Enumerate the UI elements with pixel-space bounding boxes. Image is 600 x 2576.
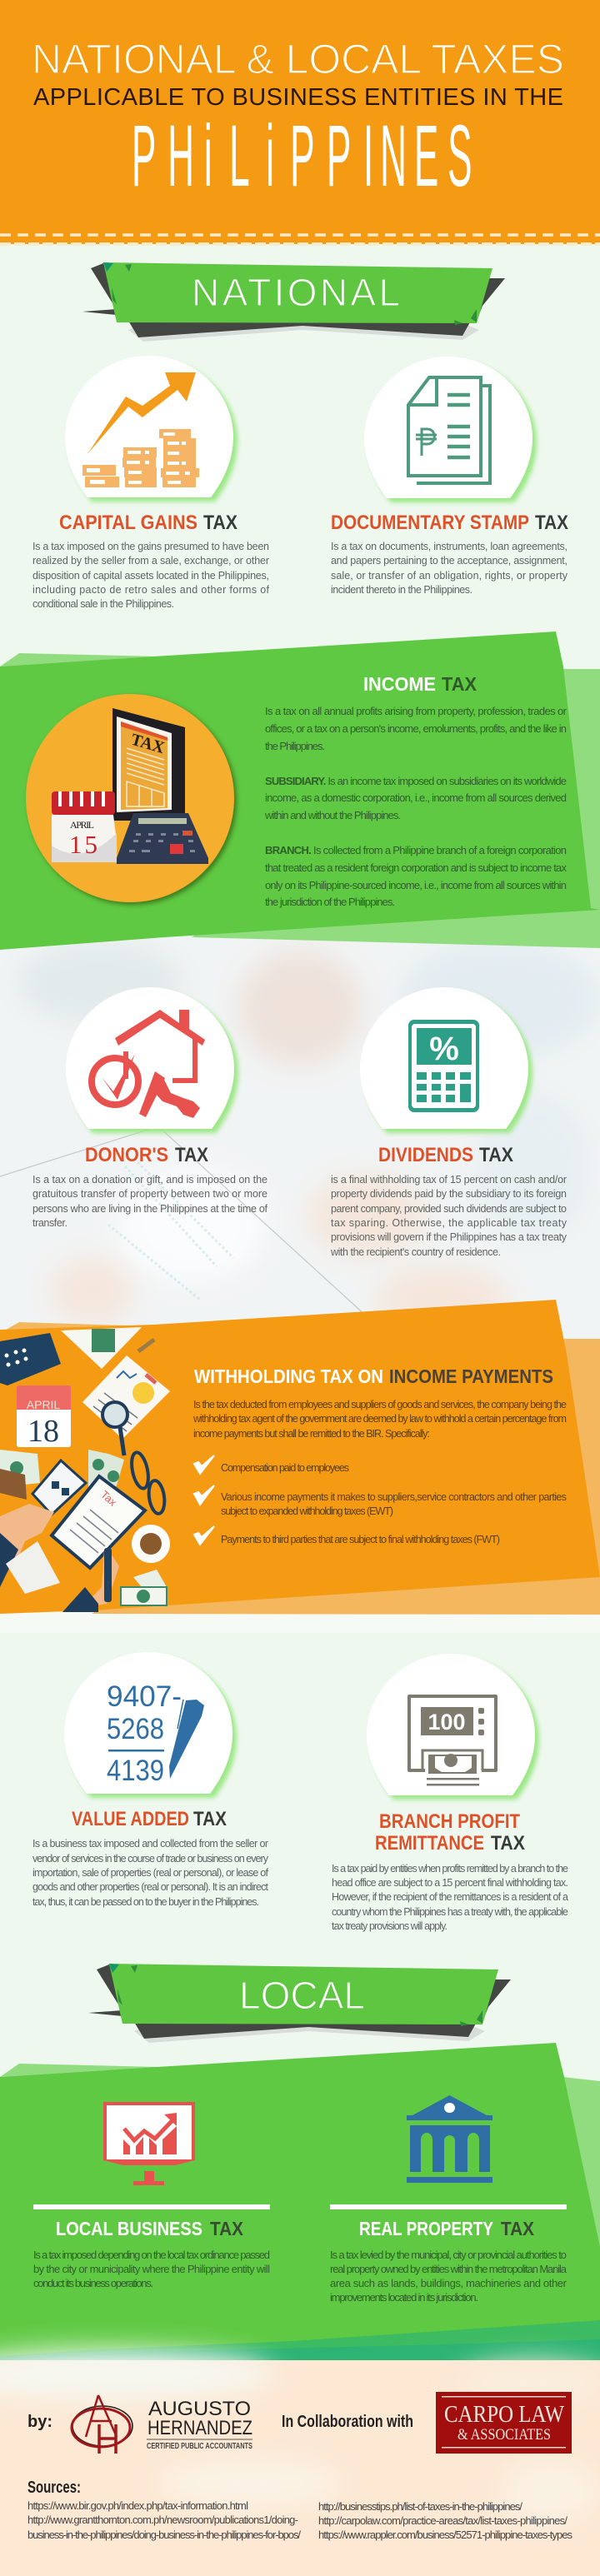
body text bbox=[32, 541, 270, 610]
logo: Augusto Hernandez: HERNANDEZ bbox=[148, 2417, 252, 2439]
body text: local business tax: conduct its business operations. bbox=[33, 2277, 153, 2289]
body text: importation, sale of properties (real or personal), or lease of bbox=[32, 1867, 269, 1879]
logo: Augusto Hernandez: AUGUSTO bbox=[148, 2398, 251, 2420]
heading: BRANCH PROFIT bbox=[379, 1810, 520, 1833]
body text: vendor of services in the course of trade or business on every bbox=[32, 1853, 269, 1865]
heading bbox=[375, 1810, 525, 1855]
body text: BRANCH. Is collected from a Philippine branch of a foreign corporation bbox=[265, 844, 567, 856]
checklist: subject to expanded withholding taxes (EWT) bbox=[221, 1505, 393, 1517]
sources list: left bbox=[28, 2499, 301, 2541]
icon: document with peso sign bbox=[408, 377, 490, 483]
heading: CAPITAL GAINS bbox=[59, 512, 198, 534]
body text: real property tax: real property owned by entities within the metropolitan Manila bbox=[330, 2263, 568, 2275]
panel: capital gains tax bbox=[32, 356, 270, 610]
panel: value added tax bbox=[32, 1652, 269, 1908]
checklist: Compensation paid to employees bbox=[221, 1462, 349, 1474]
body text: the jurisdiction of the Philippines. bbox=[265, 896, 395, 908]
illustration: desk with tax documents bbox=[0, 1327, 170, 1612]
body text: real property tax bbox=[330, 2249, 568, 2304]
heading bbox=[194, 1365, 553, 1387]
body text bbox=[32, 1838, 269, 1908]
sources heading: Sources: bbox=[28, 2479, 81, 2497]
heading: DIVIDENDS bbox=[378, 1144, 473, 1166]
body text: property dividends paid by the subsidiary to its foreign bbox=[331, 1188, 567, 1200]
body text: withholding tax agent of the government are deemed by law to withhold a certain percentage from bbox=[192, 1413, 567, 1425]
icon: monitor with rising chart bbox=[103, 2102, 195, 2185]
panel: photo background bbox=[0, 916, 600, 1350]
panel: footer bbox=[0, 2349, 600, 2576]
icon: tax tablet, calendar and calculator: APRIL bbox=[70, 819, 94, 831]
heading bbox=[363, 673, 478, 695]
header banner bbox=[0, 0, 600, 244]
heading: TAX bbox=[175, 1144, 208, 1166]
panel: dividends tax bbox=[330, 987, 568, 1258]
body text: provisions will govern if the Philippines has a tax treaty bbox=[331, 1231, 568, 1243]
icon: cash machine: 100 bbox=[428, 1710, 466, 1735]
body text: that treated as a resident foreign corporation and is subject to income tax bbox=[265, 861, 567, 874]
body text: Is the tax deducted from employees and suppliers of goods and services, the company being the bbox=[193, 1399, 567, 1410]
icon: cash machine bbox=[409, 1696, 496, 1786]
body text: goods and other properties (real or personal). It is an indirect bbox=[32, 1881, 269, 1893]
icon: government building bbox=[407, 2095, 492, 2183]
sources list: left: https://www.bir.gov.ph/index.php/tax-information.html bbox=[28, 2499, 248, 2512]
body text: local business tax: Is a tax imposed depending on the local tax ordinance passed bbox=[33, 2249, 270, 2261]
body text bbox=[192, 1399, 567, 1440]
heading: INCOME PAYMENTS bbox=[389, 1365, 553, 1387]
panel: withholding tax band bbox=[0, 1300, 600, 1633]
body text: parent company, provided such dividends are subject to bbox=[331, 1203, 567, 1215]
credit: by: by: bbox=[28, 2413, 52, 2431]
body text: Is a tax imposed on the gains presumed to have been bbox=[32, 541, 269, 552]
panel: income tax band bbox=[0, 632, 600, 950]
ribbon: local: LOCAL bbox=[239, 1974, 365, 2017]
icon: tax tablet, calendar and calculator: TAX bbox=[129, 731, 167, 757]
heading: local business tax: LOCAL BUSINESS bbox=[56, 2218, 202, 2239]
body text: head office are subject to a 15 percent final withholding tax. bbox=[332, 1877, 568, 1889]
heading: TAX bbox=[491, 1832, 525, 1855]
sources list: right: http://carpolaw.com/practice-areas/tax/list-taxes-philippines/ bbox=[318, 2514, 568, 2527]
heading: WITHHOLDING TAX ON bbox=[194, 1365, 383, 1387]
body text: country whom the Philippines has a treaty with, the applicable bbox=[332, 1906, 568, 1918]
body text: tax treaty provisions will apply. bbox=[332, 1920, 448, 1932]
heading: VALUE ADDED bbox=[72, 1808, 189, 1830]
body text: tax, thus, it can be passed on to the buyer in the Philippines. bbox=[32, 1896, 259, 1908]
body text: SUBSIDIARY. Is an income tax imposed on subsidiaries on its worldwide bbox=[265, 775, 567, 787]
body text: offices, or a tax on a person's income, emoluments, profits, and the like in bbox=[265, 722, 567, 735]
body text: disposition of capital assets located in the Philippines, bbox=[32, 570, 269, 582]
heading: INCOME bbox=[363, 673, 436, 695]
heading: TAX bbox=[193, 1808, 227, 1830]
body text: gratuitous transfer of property between two or more bbox=[32, 1188, 268, 1200]
sources list: left: business-in-the-philippines/doing-business-in-the-philippines-for-bpos/ bbox=[28, 2529, 301, 2541]
body text: conditional sale in the Philippines. bbox=[32, 598, 174, 610]
icon: tax tablet, calendar and calculator: 15 bbox=[69, 830, 98, 859]
icon: handwritten sum and pen bbox=[107, 1680, 204, 1787]
heading: real property tax: TAX bbox=[501, 2218, 535, 2239]
title line 3: PHiLiPPINES bbox=[132, 107, 472, 205]
body text: within and without the Philippines. bbox=[264, 809, 401, 821]
logo: Carpo Law and Associates: CARPO LAW bbox=[444, 2401, 565, 2428]
heading: DONOR'S bbox=[85, 1144, 168, 1166]
body text: income payments but shall be remitted to the BIR. Specifically: bbox=[193, 1428, 430, 1440]
icon: handwritten sum and pen: 5268 bbox=[107, 1713, 164, 1745]
title line 2: APPLICABLE TO BUSINESS ENTITIES IN THE bbox=[33, 84, 563, 111]
ribbon: national: NATIONAL bbox=[192, 271, 400, 314]
body text: with the recipient's country of residence. bbox=[330, 1246, 501, 1258]
body text: and papers pertaining to the acceptance, assignment, bbox=[331, 555, 568, 567]
heading: TAX bbox=[479, 1144, 513, 1166]
heading: REMITTANCE bbox=[375, 1832, 484, 1855]
panel: donor's tax bbox=[32, 987, 268, 1229]
heading: TAX bbox=[442, 673, 478, 695]
sources list: left: http://www.grantthornton.com.ph/newsroom/publications1/doing- bbox=[28, 2514, 298, 2526]
body text: is a final withholding tax of 15 percent on cash and/or bbox=[331, 1174, 567, 1186]
heading: TAX bbox=[535, 512, 568, 534]
icon: percent calculator bbox=[408, 1020, 479, 1112]
body text bbox=[330, 1174, 568, 1258]
body text: Is a tax on a donation or gift, and is imposed on the bbox=[32, 1174, 268, 1186]
illustration: desk with tax documents: 18 bbox=[28, 1414, 59, 1449]
ribbon: local bbox=[88, 1964, 511, 2043]
checklist: Various income payments it makes to suppliers,service contractors and other parties bbox=[221, 1491, 567, 1503]
logo: Augusto Hernandez bbox=[72, 2395, 252, 2454]
body text: real property tax: Is a tax levied by the municipal, city or provincial authorities to bbox=[330, 2249, 567, 2261]
icon: handwritten sum and pen: 4139 bbox=[107, 1755, 164, 1787]
body text: Is a tax on documents, instruments, loan agreements, bbox=[331, 541, 568, 552]
icon: tax tablet, calendar and calculator bbox=[26, 694, 237, 905]
checklist: Payments to third parties that are subject to final withholding taxes (FWT) bbox=[221, 1534, 500, 1545]
body text: incident thereto in the Philippines. bbox=[331, 584, 472, 596]
body text bbox=[331, 541, 568, 596]
body text: income, as a domestic corporation, i.e., income from all sources derived bbox=[265, 791, 567, 804]
checklist bbox=[194, 1455, 567, 1545]
body text bbox=[332, 1863, 568, 1932]
body text: tax sparing. Otherwise, the applicable tax treaty bbox=[331, 1217, 568, 1229]
body text bbox=[32, 1174, 268, 1229]
body text: Is a business tax imposed and collected from the seller or bbox=[32, 1838, 268, 1850]
icon: growth arrow and coins bbox=[82, 372, 199, 487]
illustration: desk with tax documents: APRIL bbox=[27, 1398, 60, 1411]
body text: realized by the seller from a sale, exchange, or other bbox=[32, 555, 269, 567]
logo: Carpo Law and Associates: & ASSOCIATES bbox=[458, 2426, 551, 2444]
heading: TAX bbox=[203, 512, 238, 534]
body text: only on its Philippine-sourced income, i.e., income from all sources within bbox=[265, 879, 567, 891]
body text bbox=[264, 705, 568, 908]
heading: local business tax: TAX bbox=[210, 2218, 244, 2239]
heading: DOCUMENTARY STAMP bbox=[331, 512, 529, 534]
icon: house and stamp bbox=[92, 1010, 205, 1118]
icon: handwritten sum and pen: 9407- bbox=[107, 1680, 182, 1713]
panel: local taxes band bbox=[0, 2043, 600, 2360]
sources list: right: https://www.rappler.com/business/52571-philippine-taxes-types bbox=[318, 2529, 573, 2541]
panel: branch profit remittance tax bbox=[332, 1654, 568, 1932]
body text: local business tax bbox=[33, 2249, 270, 2289]
body text: sale, or transfer of an obligation, rights, or property bbox=[331, 570, 568, 582]
body text: real property tax: improvements located in its jurisdiction. bbox=[330, 2291, 478, 2304]
sources list: right: http://businesstips.ph/list-of-taxes-in-the-philippines/ bbox=[318, 2500, 522, 2513]
divider bars bbox=[33, 2204, 567, 2209]
body text: Is a tax on all annual profits arising from property, profession, trades or bbox=[265, 705, 568, 717]
body text: the Philippines. bbox=[265, 740, 325, 752]
text: in collaboration with: In Collaboration with bbox=[282, 2413, 413, 2431]
body text: real property tax: area such as lands, buildings, machineries and other bbox=[330, 2277, 568, 2289]
sources list: right bbox=[318, 2500, 573, 2541]
body text: However, if the recipient of the remittances is a resident of a bbox=[332, 1891, 568, 1903]
panel: documentary stamp tax bbox=[331, 357, 568, 596]
body text: transfer. bbox=[32, 1217, 68, 1229]
logo: Augusto Hernandez: CERTIFIED PUBLIC ACCOUNTANTS bbox=[147, 2442, 252, 2451]
ribbon: national bbox=[82, 262, 505, 342]
body text: including pacto de retro sales and other forms of bbox=[32, 584, 270, 596]
title line 1: NATIONAL & LOCAL TAXES bbox=[32, 36, 564, 82]
icon: percent calculator: % bbox=[429, 1031, 459, 1067]
body text: local business tax: by the city or municipality where the Philippine entity will bbox=[33, 2263, 270, 2275]
logo: Carpo Law and Associates bbox=[436, 2392, 572, 2454]
heading: real property tax: REAL PROPERTY bbox=[359, 2218, 493, 2239]
body text: persons who are living in the Philippines at the time of bbox=[32, 1203, 268, 1215]
body text: Is a tax paid by entities when profits remitted by a branch to the bbox=[332, 1863, 568, 1875]
illustration: desk with tax documents: Tax bbox=[98, 1488, 119, 1509]
